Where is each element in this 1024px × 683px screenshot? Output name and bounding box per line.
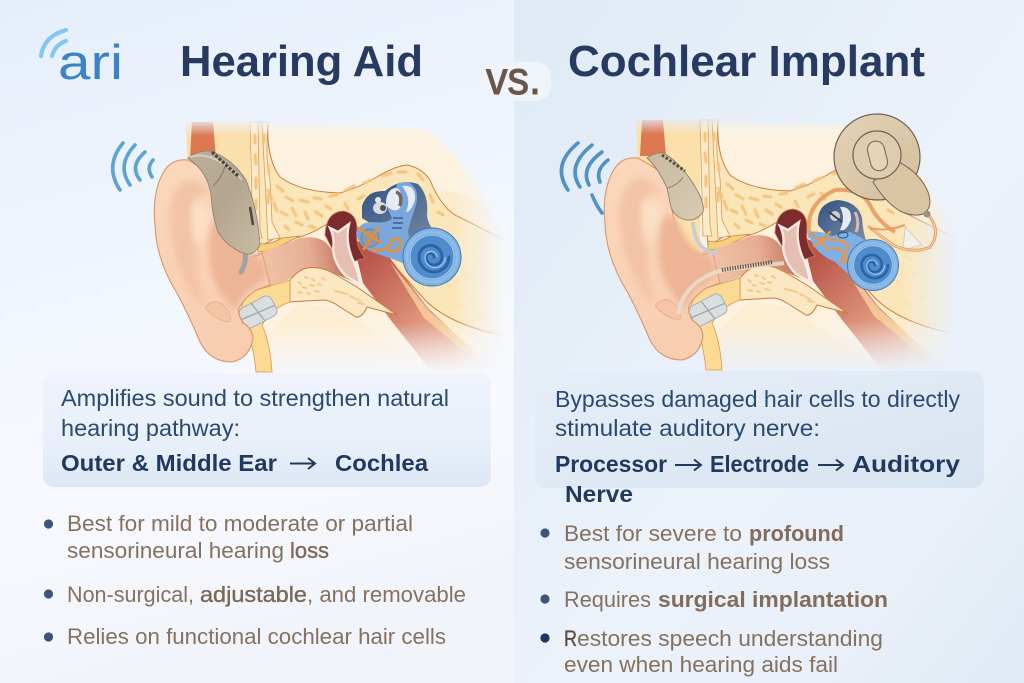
- implant leads and ossicles: [812, 232, 848, 264]
- description text: stimulate auditory nerve:: [555, 415, 820, 441]
- pathway text: Auditory: [852, 451, 960, 477]
- bullet list: hearing aid: Non-surgical,: [67, 582, 194, 607]
- bullet list: cochlear implant: [540, 521, 888, 677]
- bullet list: hearing aid: Relies on functional cochlear hair cells: [67, 624, 446, 649]
- electrode array: [678, 262, 784, 314]
- description text: hearing pathway:: [61, 415, 240, 441]
- panel: hearing aid pathway: [43, 373, 491, 487]
- illustration: ear with hearing aid: [113, 122, 505, 372]
- bullet list: cochlear implant: sensorineural hearing loss: [564, 549, 830, 574]
- bullet list: hearing aid: loss: [290, 538, 329, 563]
- inner ear: vestibule and canals: [808, 190, 895, 285]
- pathway text: [555, 451, 960, 507]
- title: Hearing Aid: Hearing Aid: [180, 37, 423, 86]
- speech processor behind ear: [647, 153, 717, 253]
- description text: Bypasses damaged hair cells to directly: [555, 386, 960, 412]
- bullet list: cochlear implant: Requires: [564, 587, 651, 612]
- title: Cochlear Implant: Cochlear Implant: [568, 37, 925, 86]
- bullet list: cochlear implant: surgical implantation: [658, 587, 888, 612]
- description text: Amplifies sound to strengthen natural: [61, 385, 449, 411]
- panel: cochlear implant pathway: [535, 371, 984, 507]
- bullet list: hearing aid: [44, 511, 466, 649]
- logo: ari: ari: [58, 36, 123, 90]
- logo: ari: [41, 30, 123, 90]
- bullet list: cochlear implant: Best for severe to: [564, 521, 742, 546]
- external coil processor: [834, 114, 930, 218]
- pathway text: Cochlea: [335, 450, 428, 476]
- pathway text: [61, 450, 428, 476]
- pathway text: Nerve: [565, 481, 633, 507]
- arrow: [290, 458, 315, 469]
- inner ear: cochlea: [847, 239, 899, 291]
- inner ear: ossicles: [358, 228, 400, 251]
- inner ear: cochlea: [402, 228, 462, 286]
- background: left panel: [0, 0, 514, 683]
- background: right panel: [514, 0, 1024, 683]
- hearing aid device: [188, 151, 260, 272]
- bullet list: cochlear implant: even when hearing aids fail: [564, 652, 838, 677]
- inner ear: vestibule and canals: [356, 182, 442, 272]
- pathway text: Outer & Middle Ear: [61, 450, 277, 476]
- bullet list: cochlear implant: profound: [749, 521, 844, 546]
- bullet list: hearing aid: , and removable: [307, 582, 466, 607]
- bullet list: hearing aid: Best for mild to moderate or partial: [67, 511, 413, 536]
- description text: [61, 385, 449, 441]
- implant lead wire: [868, 214, 936, 250]
- arrow: [675, 460, 701, 470]
- arrow: [818, 460, 843, 470]
- bullet list: cochlear implant: R: [564, 626, 577, 651]
- sound waves: [113, 143, 153, 190]
- sound waves: [561, 143, 608, 213]
- bullet list: cochlear implant: estores speech understanding: [577, 626, 883, 651]
- pathway text: Processor: [555, 451, 667, 477]
- bullet list: hearing aid: adjustable: [200, 582, 307, 607]
- vs. badge: vs.: [486, 52, 541, 104]
- description text: [555, 386, 960, 441]
- illustration: ear with cochlear implant: [561, 114, 955, 370]
- pathway text: Electrode: [710, 451, 809, 477]
- bullet list: hearing aid: sensorineural hearing: [67, 538, 284, 563]
